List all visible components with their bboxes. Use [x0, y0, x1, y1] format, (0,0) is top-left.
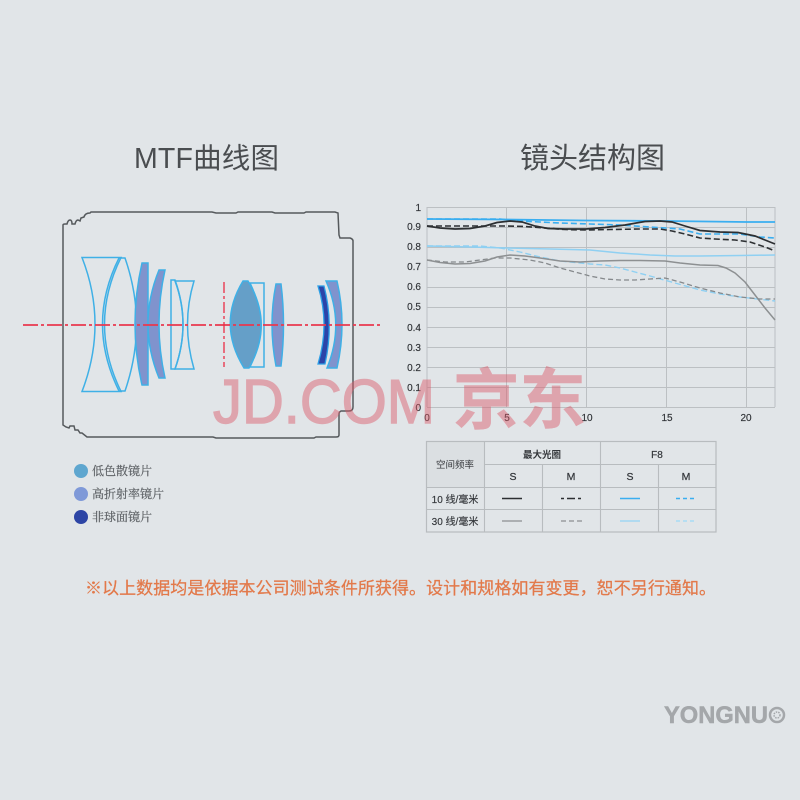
x axis labels: 20 [740, 413, 752, 424]
optical axis [23, 324, 383, 326]
JD.COM watermark [213, 363, 586, 437]
legend [74, 463, 164, 524]
lens element 4 [148, 270, 165, 378]
x axis labels [424, 413, 752, 424]
lens element 11 [326, 281, 342, 368]
lens barrel outline [63, 212, 353, 438]
lens element 9 [272, 284, 284, 366]
table headers: 最大光圈 [523, 449, 561, 461]
legend: aspherical: 非球面镜片 [92, 509, 152, 524]
y axis labels: 1 [415, 203, 421, 214]
table headers: S [509, 471, 517, 483]
y axis labels: 0 [415, 403, 421, 414]
lens element 2 [102, 258, 136, 391]
x axis labels: 0 [424, 413, 430, 424]
lens element 3 [135, 263, 148, 385]
y axis labels: 0.5 [407, 302, 421, 313]
curve: 30 lines M [427, 258, 775, 299]
y axis labels: 0.7 [407, 262, 421, 273]
curve: 30 lines S [427, 255, 775, 320]
table headers: M [682, 471, 690, 483]
JD.COM watermark: 京东 [453, 363, 586, 437]
table line samples [502, 498, 697, 521]
y axis labels: 0.9 [407, 222, 421, 233]
curve: 10 lines M [427, 226, 775, 251]
lens element 8 [230, 281, 261, 368]
title: MTF curve: MTF曲线图 [134, 143, 279, 175]
y axis labels: 0.4 [407, 323, 421, 334]
y axis labels: 0.1 [407, 383, 421, 394]
legend: high refractive index: 高折射率镜片 [92, 486, 164, 501]
title: lens structure: 镜头结构图 [520, 142, 665, 175]
x axis labels: 10 [581, 413, 593, 424]
x axis labels: 5 [504, 413, 510, 424]
y axis labels: 0.6 [407, 282, 421, 293]
y axis labels: 0.3 [407, 343, 421, 354]
curve: 30 lines F8 M [427, 246, 775, 301]
JD.COM watermark: JD.COM [213, 368, 435, 437]
legend: low dispersion: 低色散镜片 [92, 463, 152, 478]
y axis labels: 0.2 [407, 363, 421, 374]
footnote: ※以上数据均是依据本公司测试条件所获得。设计和规格如有变更，恕不另行通知。 [85, 579, 716, 598]
lens structure diagram [23, 212, 383, 438]
table headers: S [626, 471, 634, 483]
table headers: 10 线/毫米 [432, 493, 478, 506]
curve: 10 lines S [427, 221, 775, 244]
vertical aperture axis [223, 282, 225, 367]
spatial frequency table [426, 441, 716, 532]
curve: 30 lines F8 S [427, 246, 775, 256]
table headers: M [567, 471, 575, 483]
lens element 7 [250, 283, 264, 367]
logo: YONGNUO: YONGNU [664, 702, 768, 729]
curve: 10 lines F8 M [427, 219, 775, 238]
table headers: F8 [651, 450, 663, 461]
lens element 1 [82, 258, 121, 392]
lens element 10 [318, 286, 329, 364]
MTF chart [407, 203, 775, 424]
table headers [432, 449, 690, 528]
curve: 10 lines F8 S [427, 219, 775, 222]
y axis labels: 0.8 [407, 242, 421, 253]
lens element 5 [171, 280, 183, 369]
lens element 6 [175, 281, 194, 369]
table headers: 30 线/毫米 [432, 515, 478, 528]
table headers: 空间频率 [436, 459, 474, 471]
x axis labels: 15 [661, 413, 673, 424]
y axis labels [407, 203, 421, 414]
